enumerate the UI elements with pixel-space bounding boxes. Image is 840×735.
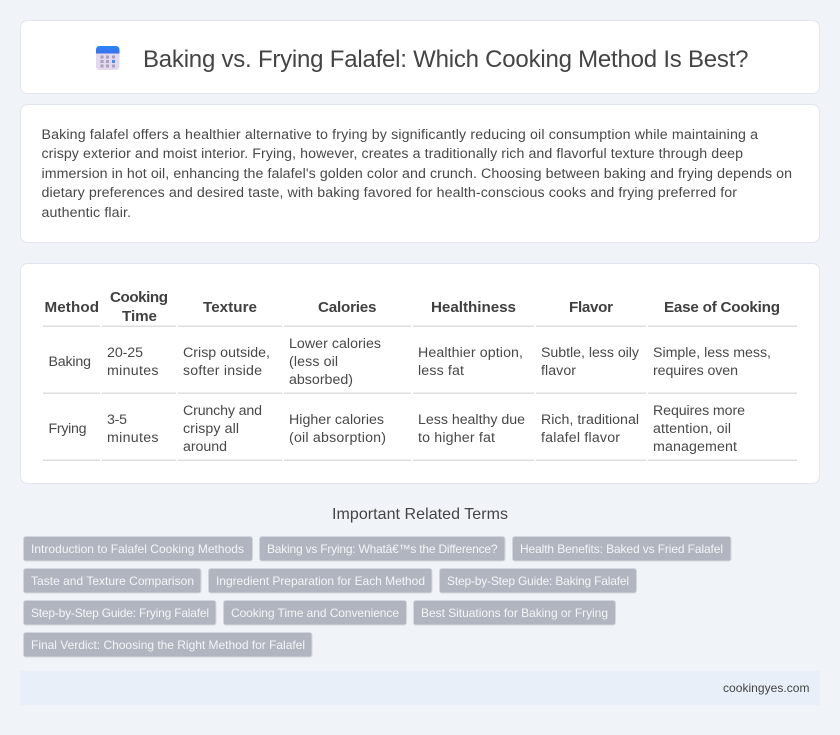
table row: frying: Crunchy and <box>183 403 262 419</box>
table row: frying: Rich, traditional <box>541 412 639 428</box>
chip: Cooking Time and Convenience <box>231 606 399 620</box>
table row: baking: Subtle, less oily <box>541 345 640 361</box>
chip: Final Verdict: Choosing the Right Method for Falafel <box>31 638 305 652</box>
table header row: Ease of Cooking <box>664 299 780 316</box>
table header row: Healthiness <box>431 299 516 316</box>
table row: frying: Requires more <box>653 403 745 419</box>
heading: important related terms: Important Related Terms <box>332 506 508 523</box>
title: Baking vs. Frying Falafel: Which Cooking Method Is Best? <box>143 46 748 73</box>
table row: baking <box>48 336 771 388</box>
chip: Best Situations for Baking or Frying <box>421 606 608 620</box>
chip <box>24 632 312 657</box>
text block: introduction: authentic flair. <box>42 205 131 221</box>
table row: baking: requires oven <box>653 363 738 379</box>
table row: frying: Less healthy due <box>418 412 525 428</box>
table row: baking: Baking <box>48 354 91 370</box>
table row: frying: 3-5 <box>107 412 127 428</box>
chip <box>24 536 252 561</box>
chip: Step-by-Step Guide: Frying Falafel <box>31 606 209 620</box>
table row: frying <box>48 403 745 455</box>
text block: introduction: dietary preferences and desired taste, with baking favored for health-conscious cooks and frying preferred for <box>42 185 737 201</box>
table row: baking: flavor <box>541 363 576 379</box>
table row: frying: to higher fat <box>418 430 495 446</box>
table row: frying: attention, oil <box>653 421 731 437</box>
chip <box>414 600 616 625</box>
table row: frying: crispy all <box>183 421 239 437</box>
table header row: Texture <box>203 299 257 316</box>
table row: frying: management <box>653 439 737 455</box>
chip <box>260 536 505 561</box>
table row: frying: around <box>183 439 227 455</box>
table header row: Time <box>122 308 157 325</box>
chip: Step-by-Step Guide: Baking Falafel <box>447 574 629 588</box>
chip <box>208 568 432 593</box>
table header row: Flavor <box>569 299 613 316</box>
footer: cookingyes.com <box>723 681 810 695</box>
chip: Ingredient Preparation for Each Method <box>216 574 425 588</box>
table row: baking: absorbed) <box>289 372 353 388</box>
panel: comparison table <box>20 264 820 484</box>
table row: baking: Lower calories <box>289 336 381 352</box>
table header row <box>44 289 780 325</box>
table row: baking: Healthier option, <box>418 345 523 361</box>
table row: baking: Simple, less mess, <box>653 345 771 361</box>
text block: introduction: Baking falafel offers a healthier alternative to frying by significantly reducing oil consumption while maintaining a <box>42 127 758 143</box>
chip: Introduction to Falafel Cooking Methods <box>31 542 244 556</box>
table row: baking: 20-25 <box>107 345 143 361</box>
chip <box>224 600 406 625</box>
footer <box>20 671 820 705</box>
icon: calendar <box>96 46 120 70</box>
chip: Health Benefits: Baked vs Fried Falafel <box>520 542 723 556</box>
table row: baking: Crisp outside, <box>183 345 270 361</box>
table row: frying: minutes <box>107 430 158 446</box>
chip <box>440 568 636 593</box>
table row: frying: Higher calories <box>289 412 384 428</box>
table row: frying: falafel flavor <box>541 430 620 446</box>
text block: introduction <box>42 127 792 221</box>
chip <box>24 600 216 625</box>
panel: title header <box>20 20 820 94</box>
text block: introduction: immersion in hot oil, enhancing the falafel's golden color and crunch. Choosing between baking and frying depends on <box>42 166 792 182</box>
table row: baking: softer inside <box>183 363 262 379</box>
chip <box>512 536 731 561</box>
table row: frying: Frying <box>48 421 86 437</box>
table header row: Method <box>44 299 99 316</box>
chip: Taste and Texture Comparison <box>31 574 194 588</box>
table row: baking: (less oil <box>289 354 338 370</box>
text block: introduction: crispy exterior and moist interior. Frying, however, creates a traditionally rich and flavorful texture through deep <box>42 146 743 162</box>
chip: Baking vs Frying: Whatâ€™s the Difference? <box>267 542 498 556</box>
table row: frying: (oil absorption) <box>289 430 386 446</box>
table header row: Cooking <box>110 289 168 306</box>
panel: related term chips <box>24 536 731 657</box>
chip <box>24 568 201 593</box>
table row: baking: less fat <box>418 363 464 379</box>
panel: introduction text <box>20 104 820 242</box>
table header row: Calories <box>318 299 376 316</box>
table row: baking: minutes <box>107 363 158 379</box>
